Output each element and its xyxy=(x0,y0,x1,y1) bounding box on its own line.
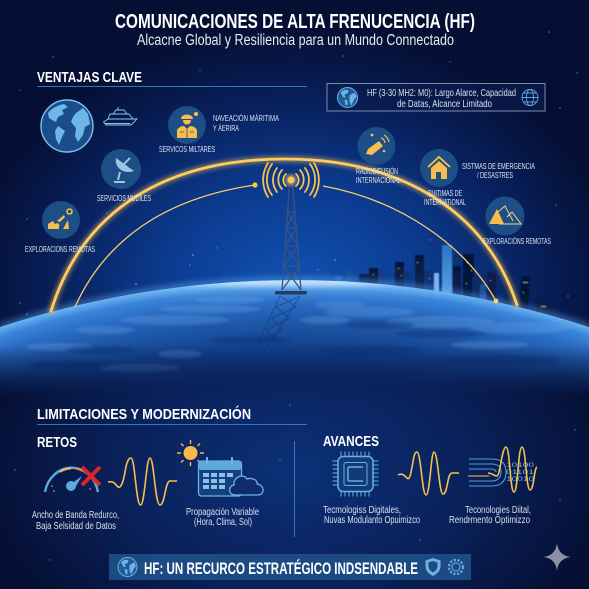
radio tower xyxy=(275,174,307,294)
icon: broadcast xyxy=(358,127,396,165)
callout: HF definition xyxy=(327,84,545,111)
icon: house xyxy=(420,149,458,187)
item: radiodifusión xyxy=(356,127,401,185)
icon: calendar xyxy=(198,457,242,496)
lower section background xyxy=(0,330,589,589)
label: internacional: SUITIMAS DE xyxy=(428,188,462,198)
text: ancho de banda: Baja Selsidad de Datos xyxy=(36,520,116,532)
banner xyxy=(109,554,471,580)
title: COMUNICACIONES DE ALTA FRENUCENCIA (HF) xyxy=(115,11,475,33)
text: ancho de banda: Ancho de Banda Redurco, xyxy=(32,509,119,521)
icon: gear xyxy=(449,560,463,574)
icon: ship xyxy=(104,107,137,125)
text: tecnologías digitales: Nuvas Modulanto Opuimizco xyxy=(324,514,420,526)
icon: shield xyxy=(426,558,440,576)
text: rendimiento: Rendrmento Optimizzo xyxy=(449,514,530,526)
item: exploraciones remotas izquierda xyxy=(25,201,95,254)
label: SERVICIOS MUDILES xyxy=(97,193,151,203)
icon: digital signal: 10100 xyxy=(506,462,535,469)
tower reflection xyxy=(254,296,300,352)
icon: sparkle star xyxy=(543,543,571,571)
icon: globe xyxy=(338,88,358,108)
icon: digital signal: 10010 xyxy=(506,476,535,483)
icon: large globe xyxy=(41,100,93,152)
label: emergencia: / DESASTRES xyxy=(477,170,513,180)
item: servicios móviles xyxy=(97,149,151,203)
item: exploraciones remotas derecha xyxy=(483,196,551,246)
callout text: de Datas, Alcance Limitado xyxy=(397,98,492,110)
label: RADIODIFUSIÓN xyxy=(356,166,398,176)
item: sistemas de emergencia xyxy=(420,149,535,207)
icon: exploration xyxy=(42,201,80,239)
label: internacional: INTERNATIONAL xyxy=(424,197,466,207)
earth xyxy=(0,278,589,400)
text: tecnologías digitales: Tecmologiss Digitales, xyxy=(323,504,401,516)
heading: limitaciones: LIMITACIONES Y MODERNIZACIÓN xyxy=(37,405,251,423)
icon: gauge xyxy=(45,468,98,492)
panel: retos xyxy=(32,434,263,532)
icon: sun xyxy=(177,440,204,466)
label: INTERNACIONAL xyxy=(356,175,401,185)
heading: ventajas clave: VENTAJAS CLAVE xyxy=(37,69,142,86)
icon: grid globe xyxy=(522,90,538,106)
label: navegación: NAVEACIÓN MÁRITIMA xyxy=(213,113,279,123)
text: rendimiento: Teconologies Diital, xyxy=(465,504,531,516)
label: navegación: Y ÁERIRA xyxy=(213,123,239,133)
panel: avances xyxy=(323,433,537,526)
icon: globe xyxy=(118,558,137,576)
icon: digital signal: 01101 xyxy=(506,469,535,476)
icon: cloud xyxy=(230,476,263,495)
heading: retos: RETOS xyxy=(37,434,77,451)
banner text: HF: UN RECURCO ESTRATÉGICO INDSENDABLE xyxy=(144,559,418,578)
icon: satellite dish xyxy=(101,149,141,189)
heading: avances: AVANCES xyxy=(323,433,379,450)
icon: digital signal xyxy=(468,447,537,492)
label: emergencia: SISTMAS DE EMERGENCIA xyxy=(462,161,535,171)
subtitle: Alcacne Global y Resiliencia para un Mundo Connectado xyxy=(137,32,454,49)
label: SERVICOS MILTARES xyxy=(159,144,215,154)
icon: red cross xyxy=(82,467,100,485)
icon: signal wave xyxy=(398,452,459,495)
outer signal arc xyxy=(51,159,517,311)
radio waves xyxy=(263,163,319,197)
item: servicios militares xyxy=(159,106,215,154)
label: EXPLORACIONS REMOTAS xyxy=(25,244,95,254)
city skyline xyxy=(335,245,558,318)
text: propagación: Propagación Variable xyxy=(186,506,259,518)
text: propagación: (Hora, Clima, Sol) xyxy=(194,516,252,528)
icon: chip xyxy=(332,452,378,496)
icon: mountains xyxy=(486,196,524,236)
inner signal arc xyxy=(75,182,498,307)
icon: signal wave xyxy=(108,458,177,505)
icon: soldier xyxy=(168,106,206,144)
callout text: HF (3-30 MH2: M0): Largo Alarce, Capacidad xyxy=(367,87,516,99)
